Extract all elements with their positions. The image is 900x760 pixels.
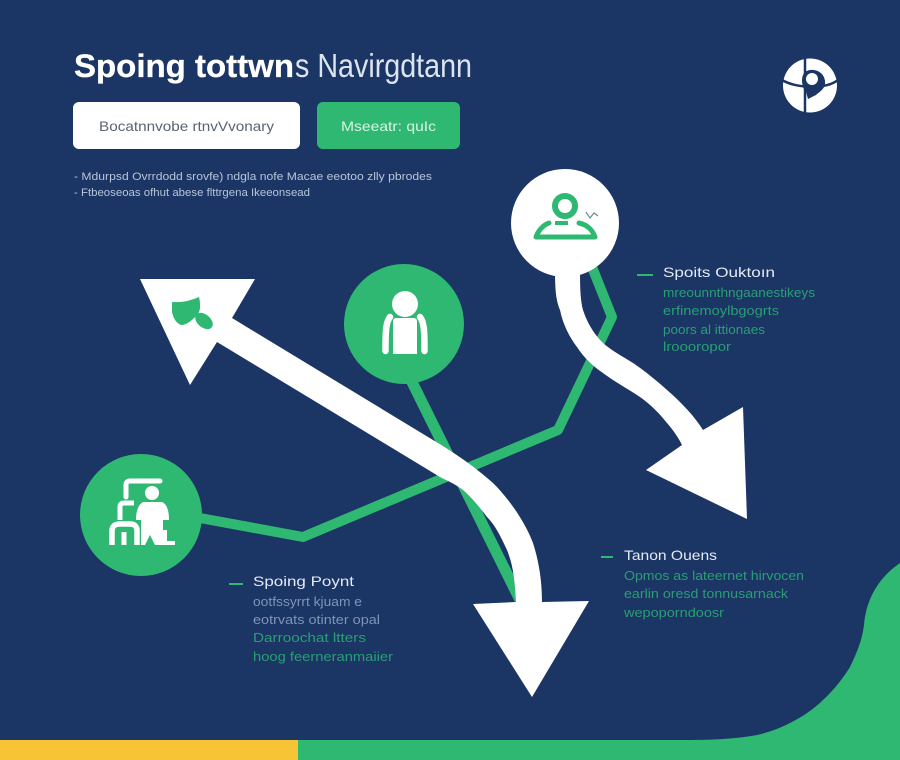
label: spoing poynt: Spoing Poynt xyxy=(253,573,354,589)
label: spoits outktoin xyxy=(637,264,816,354)
connector: green route xyxy=(200,262,612,537)
button: white summary: Bocatnnvobe rtnvVvonary xyxy=(99,118,274,134)
label: tanon quens: earlin oresd tonnusarnack xyxy=(624,586,789,601)
label: tanon quens xyxy=(601,547,804,620)
label: spoits outktoin: lroooropor xyxy=(663,339,732,354)
intro bullet text: - Ftbeoseoas ofhut abese flttrgena Ikeeonsead xyxy=(74,187,310,199)
intro bullet text: - Mdurpsd Ovrrdodd srovfe) ndgla nofe Macae eeotoo zlly pbrodes xyxy=(74,171,433,183)
button: green: Mseeatr: quIc xyxy=(341,118,436,134)
label: spoing poynt xyxy=(229,573,394,664)
icon: logo xyxy=(782,57,838,114)
button: white summary xyxy=(73,102,300,149)
icon: person xyxy=(386,291,424,354)
arrow: large white up-left and down xyxy=(140,279,589,697)
title: Spoing tottwn xyxy=(74,48,294,84)
label: spoing poynt: hoog feerneranmaiier xyxy=(253,649,394,664)
icon: person with chair xyxy=(112,481,175,545)
title xyxy=(74,47,472,84)
icon: leaf xyxy=(172,297,216,332)
connector: green drop line xyxy=(410,378,525,610)
label: spoits outktoin: erfinemoylbgogrts xyxy=(663,303,780,318)
label: spoing poynt: eotrvats otinter opal xyxy=(253,612,380,627)
arrow: white right branch xyxy=(555,262,747,519)
button: green xyxy=(317,102,460,149)
label: spoing poynt: ootfssyrrt kjuam e xyxy=(253,594,362,609)
circle node: middle green xyxy=(344,264,464,384)
label: tanon quens: wepoporndoosr xyxy=(623,605,725,620)
bottom band: green wave xyxy=(298,563,900,760)
bottom band: yellow xyxy=(0,740,298,760)
label: spoing poynt: Darroochat ltters xyxy=(253,630,367,645)
circle node: top white xyxy=(511,169,619,277)
label: spoits outktoin: mreounnthngaanestikeys xyxy=(663,285,816,300)
circle node: left green xyxy=(80,454,202,576)
title: s Navirgdtann xyxy=(295,47,472,84)
label: spoits outktoin: Spoits Ouktoın xyxy=(663,264,775,280)
label: tanon quens: Opmos as lateernet hirvocen xyxy=(624,568,804,583)
label: spoits outktoin: poors al ittionaes xyxy=(663,322,766,337)
label: tanon quens: Tanon Ouens xyxy=(624,547,717,563)
intro bullet text xyxy=(74,171,433,199)
icon: person at desk xyxy=(536,196,598,237)
